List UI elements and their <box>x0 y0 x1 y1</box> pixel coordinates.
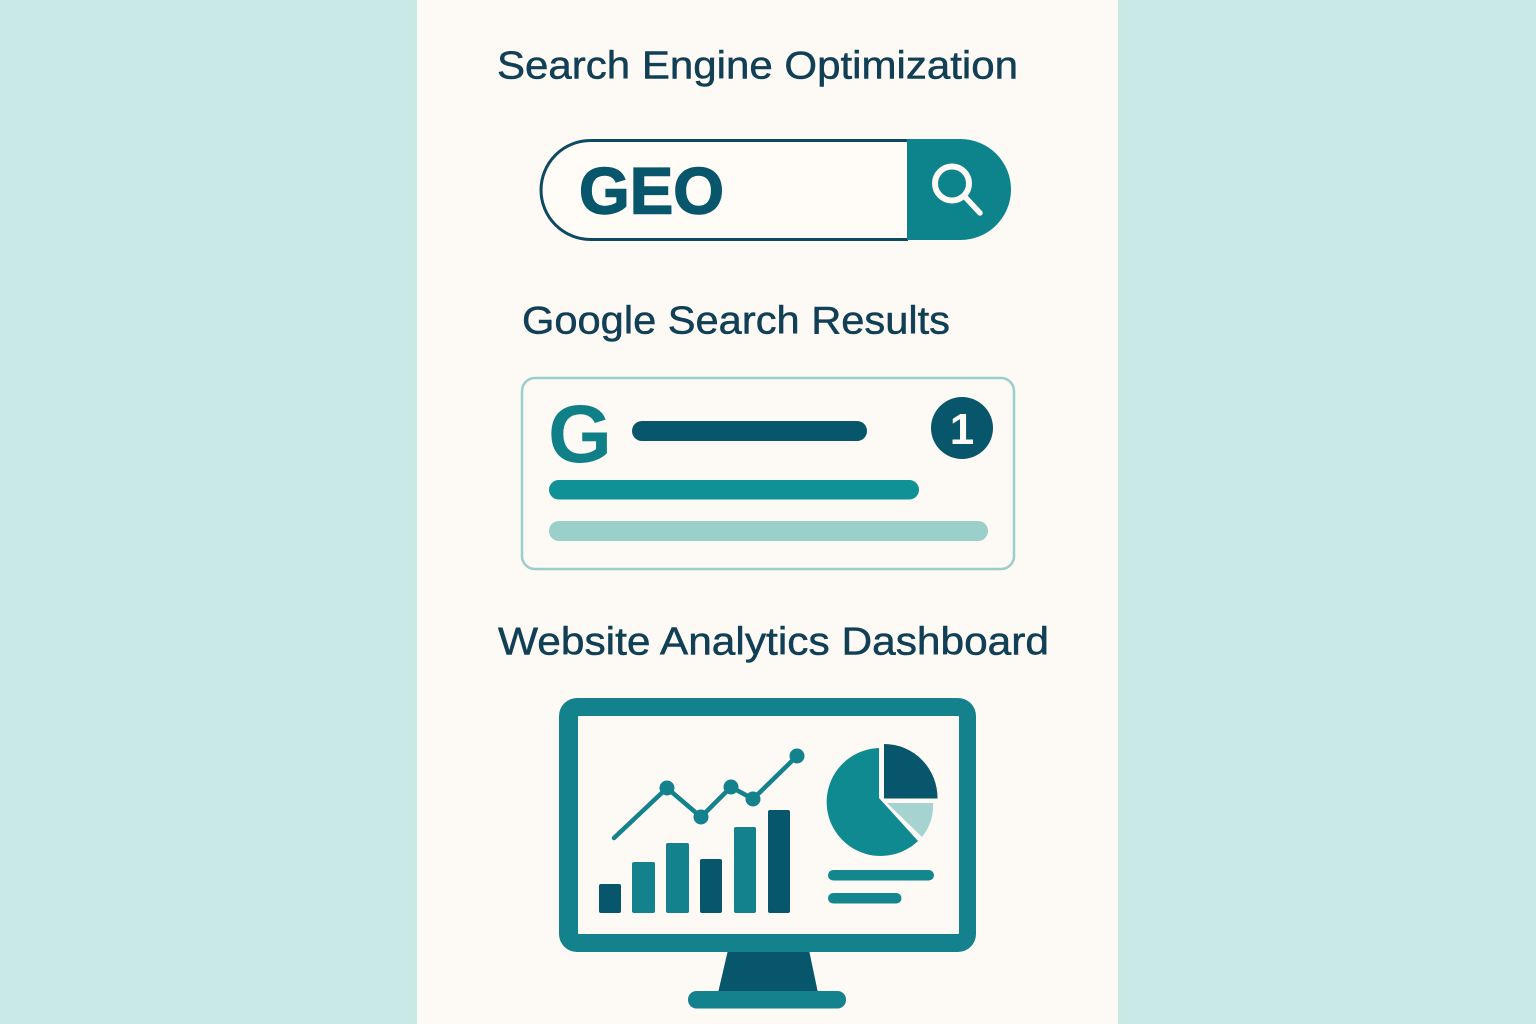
search button <box>907 139 1011 240</box>
rank badge: 1 <box>950 405 974 454</box>
panel: search result card <box>522 378 1014 569</box>
monitor screen <box>578 716 959 934</box>
card frame <box>522 378 1014 569</box>
heading: website analytics dashboard: Website Analytics Dashboard <box>498 620 1049 664</box>
search bar <box>541 139 1011 240</box>
central panel <box>417 0 1118 1024</box>
result description bar <box>549 521 988 541</box>
bar chart <box>599 810 790 913</box>
icon: analytics monitor <box>559 698 976 1008</box>
result url bar <box>549 480 919 500</box>
heading: google search results: Google Search Results <box>522 300 950 342</box>
monitor frame <box>559 698 976 952</box>
search term: GEO <box>579 154 724 228</box>
pie chart <box>827 744 938 856</box>
icon: magnifying glass <box>935 166 980 213</box>
heading: search engine optimization: Search Engine Optimization <box>497 44 1018 88</box>
search field <box>541 140 908 240</box>
line chart <box>614 748 804 838</box>
monitor base <box>688 991 846 1008</box>
rank badge <box>931 397 993 459</box>
icon: google g: G <box>548 389 612 480</box>
legend lines <box>828 870 934 904</box>
result title bar <box>632 421 867 441</box>
monitor stand <box>718 950 818 993</box>
